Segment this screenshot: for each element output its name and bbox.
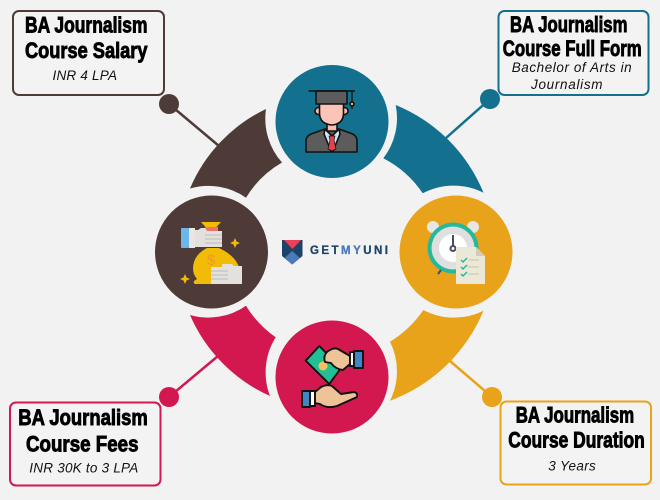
ring segment: brown: [190, 109, 282, 198]
connector: full form: [446, 89, 500, 138]
icon: hands exchanging money: [302, 346, 363, 407]
panel: salary: Course Salary: [25, 38, 148, 63]
icon: graduate: [306, 91, 357, 152]
heading: full form: BA Journalism: [510, 12, 628, 37]
panel: fees: [10, 402, 160, 486]
circle: graduate: [276, 65, 388, 178]
icon: money bag: $: [207, 252, 216, 269]
panel: full form: Journalism: [530, 77, 602, 92]
connector: salary: [159, 94, 219, 146]
panel: fees: INR 30K to 3 LPA: [29, 460, 138, 476]
ring segment: crimson: [190, 306, 276, 396]
panel: salary: [13, 11, 164, 95]
heading: fees: BA Journalism: [18, 405, 148, 430]
circle: money bag: [155, 196, 268, 308]
panel: salary: INR 4 LPA: [52, 68, 117, 83]
circle: payment: [276, 320, 388, 434]
panel: full form: [498, 11, 648, 95]
icon: money bag: [180, 222, 242, 284]
circle: clock: [400, 196, 512, 308]
connector: duration: [450, 361, 502, 407]
connector: fees: [159, 356, 218, 407]
panel: duration: [500, 402, 651, 484]
panel: full form: Bachelor of Arts in: [512, 60, 632, 75]
panel: duration: 3 Years: [548, 458, 596, 474]
ring segment: teal: [383, 105, 484, 193]
heading: salary: BA Journalism: [25, 12, 148, 38]
icon: clock and checklist: [427, 221, 485, 284]
ring segment: gold: [390, 310, 484, 401]
logo: GetMyUni: GETMYUNI: [310, 245, 388, 257]
logo: GetMyUni: [282, 240, 388, 264]
panel: fees: Course Fees: [26, 432, 138, 456]
